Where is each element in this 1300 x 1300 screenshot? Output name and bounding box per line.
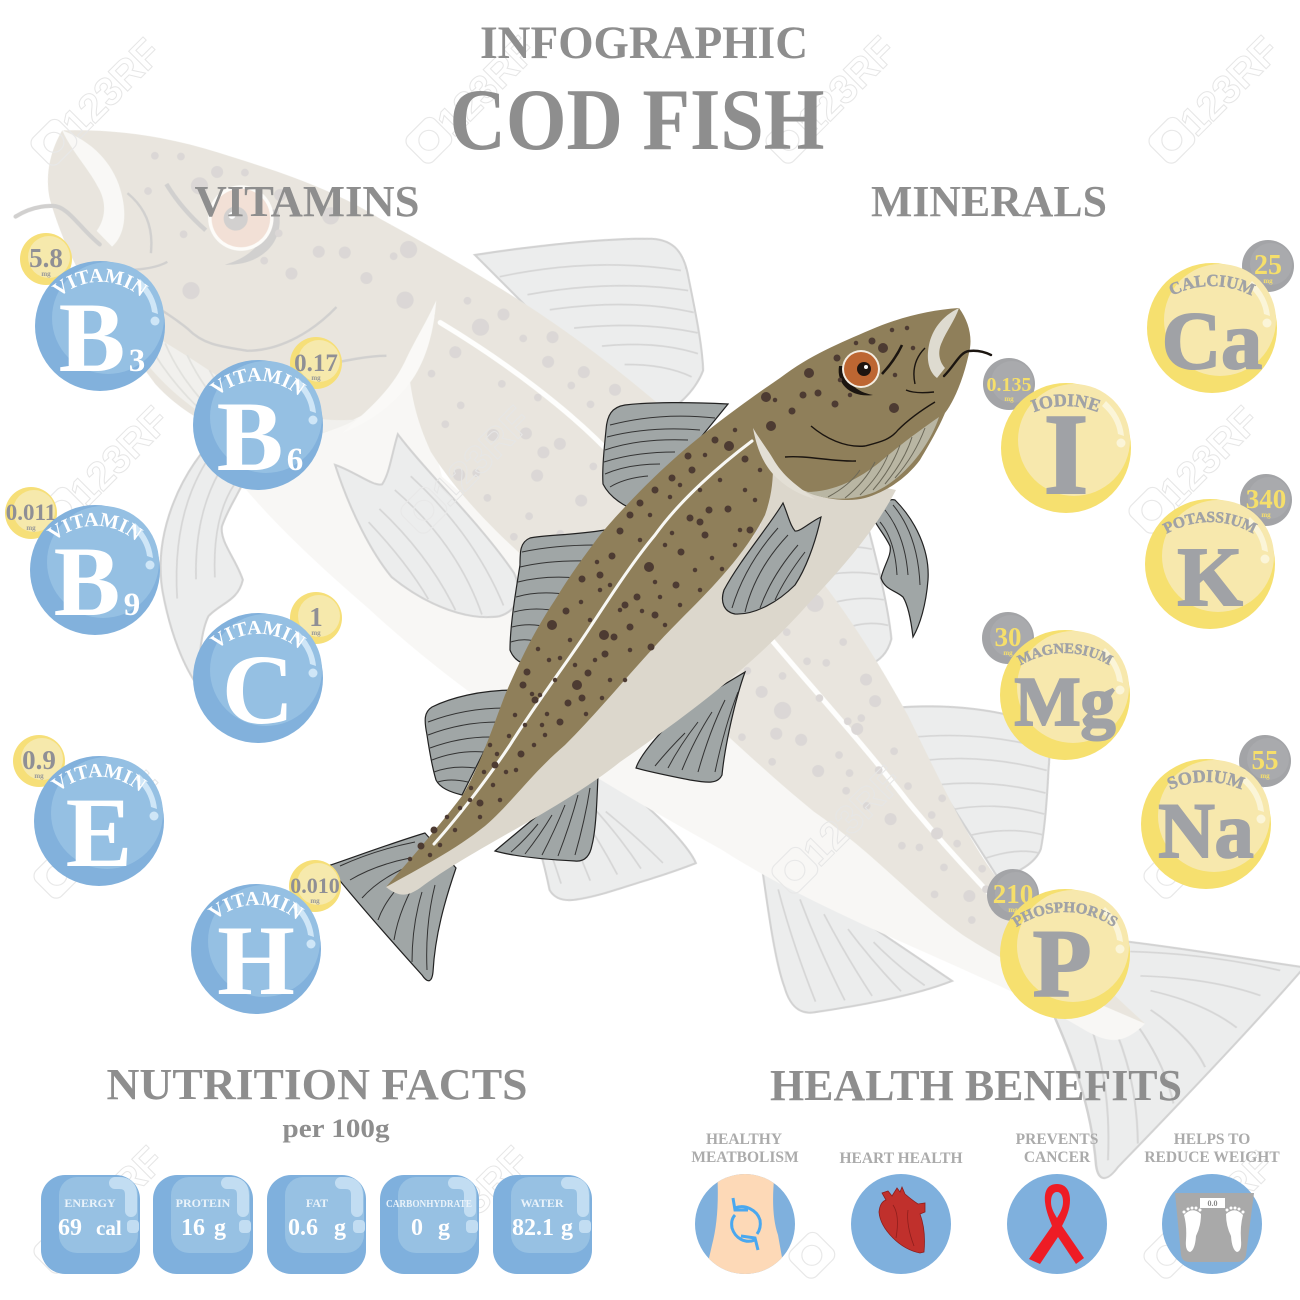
heading: nutrition facts: NUTRITION FACTS bbox=[106, 1060, 528, 1109]
vitamin E: E bbox=[66, 777, 132, 888]
vitamin B6: 0.17 bbox=[294, 350, 338, 377]
mineral calcium: CALCIUM bbox=[1170, 274, 1256, 296]
vitamin B9: B bbox=[54, 526, 120, 637]
mineral iodine: mg bbox=[1004, 395, 1014, 403]
tile: carbonhydrate: g bbox=[438, 1215, 450, 1241]
vitamin B9: 9 bbox=[124, 587, 140, 623]
vitamin E bbox=[13, 735, 164, 888]
mineral iodine bbox=[983, 358, 1131, 518]
benefit: heart health: HEART HEALTH bbox=[839, 1150, 963, 1167]
mineral iodine: I bbox=[1044, 391, 1088, 518]
tile: energy: cal bbox=[96, 1216, 122, 1240]
icon: scale with feet bbox=[1175, 1193, 1254, 1262]
title: INFOGRAPHIC bbox=[480, 17, 808, 69]
vitamin B9: 0.011 bbox=[6, 500, 56, 525]
mineral magnesium: MAGNESIUM bbox=[1016, 643, 1114, 666]
heading: health benefits: HEALTH BENEFITS bbox=[770, 1061, 1182, 1110]
mineral magnesium bbox=[982, 612, 1130, 760]
mineral sodium bbox=[1141, 735, 1291, 889]
mineral calcium bbox=[1147, 240, 1294, 393]
benefit: healthy metabolism bbox=[691, 1131, 799, 1280]
vitamin B6: B bbox=[217, 381, 283, 492]
tile: carbonhydrate bbox=[380, 1175, 479, 1274]
tile: carbonhydrate: CARBONHYDRATE bbox=[386, 1198, 472, 1210]
vitamin H: 0.010 bbox=[290, 873, 340, 898]
benefit: healthy metabolism: MEATBOLISM bbox=[691, 1149, 799, 1166]
vitamin B3 bbox=[20, 233, 199, 399]
benefit: helps to reduce weight: REDUCE WEIGHT bbox=[1144, 1149, 1280, 1166]
watermarks: 123RF bbox=[1167, 1144, 1283, 1260]
vitamin B6 bbox=[193, 337, 342, 492]
watermarks: 123RF bbox=[1152, 399, 1268, 515]
vitamin B3: mg bbox=[41, 270, 51, 278]
icon: cycle arrows bbox=[732, 1198, 760, 1250]
benefit: helps to reduce weight: HELPS TO bbox=[1174, 1131, 1250, 1148]
watermarks: 123RF bbox=[422, 1139, 538, 1255]
tile: protein: g bbox=[214, 1215, 226, 1241]
vitamin E: mg bbox=[34, 772, 44, 780]
mineral iodine: 0.135 bbox=[986, 374, 1032, 396]
tile: energy: 69 bbox=[58, 1215, 82, 1241]
mineral calcium: 25 bbox=[1254, 250, 1282, 281]
heading: nutrition facts bbox=[106, 1060, 528, 1143]
title: COD FISH bbox=[450, 72, 824, 169]
vitamin C: VITAMIN bbox=[209, 620, 306, 648]
vitamin B3: B bbox=[59, 282, 125, 393]
mineral phosphorus: mg bbox=[1008, 906, 1018, 914]
watermarks: 123RF bbox=[62, 399, 178, 515]
heading: minerals: MINERALS bbox=[871, 177, 1107, 226]
benefit: prevents cancer: CANCER bbox=[1024, 1149, 1091, 1166]
icon: heart bbox=[879, 1187, 925, 1253]
tile: energy: ENERGY bbox=[64, 1196, 116, 1210]
mineral phosphorus: 210 bbox=[993, 879, 1033, 909]
tile: protein: 16 bbox=[181, 1215, 205, 1241]
vitamin C bbox=[193, 592, 342, 745]
tile: protein: PROTEIN bbox=[176, 1196, 231, 1210]
mineral sodium: 55 bbox=[1252, 745, 1278, 775]
watermarks: 123RF bbox=[57, 1139, 173, 1255]
tile: protein bbox=[153, 1175, 253, 1274]
mineral phosphorus: P bbox=[1033, 910, 1091, 1017]
mineral potassium bbox=[1145, 474, 1292, 629]
vitamin B6: VITAMIN bbox=[209, 368, 306, 396]
watermarks: 123RF bbox=[54, 31, 170, 147]
tile: fat bbox=[267, 1175, 366, 1274]
vitamin C: mg bbox=[311, 629, 321, 637]
tile: fat: FAT bbox=[306, 1196, 328, 1210]
mineral potassium: POTASSIUM bbox=[1162, 512, 1258, 534]
tile: energy bbox=[41, 1175, 140, 1274]
watermarks: 123RF bbox=[57, 764, 173, 880]
mineral magnesium: Mg bbox=[1014, 664, 1116, 741]
title bbox=[450, 17, 824, 169]
mineral magnesium: 30 bbox=[994, 622, 1022, 652]
tile: water: WATER bbox=[520, 1196, 564, 1210]
tile: water: 82.1 bbox=[512, 1215, 554, 1241]
watermarks: 123RF bbox=[1167, 764, 1283, 880]
vitamin B6: mg bbox=[311, 374, 321, 382]
benefit: heart health bbox=[839, 1150, 963, 1274]
vitamin C: 1 bbox=[309, 602, 323, 632]
tile: water bbox=[493, 1175, 592, 1274]
mineral calcium: Ca bbox=[1162, 295, 1262, 386]
benefit: helps to reduce weight bbox=[1144, 1131, 1280, 1274]
vitamin H: H bbox=[217, 905, 295, 1016]
mineral sodium: mg bbox=[1260, 772, 1270, 780]
mineral potassium: K bbox=[1177, 531, 1243, 624]
mineral iodine: IODINE bbox=[1030, 394, 1100, 412]
vitamin H: mg bbox=[310, 897, 320, 905]
mineral potassium: 340 bbox=[1246, 484, 1286, 514]
vitamin C: C bbox=[222, 634, 294, 745]
mineral magnesium: mg bbox=[1003, 649, 1013, 657]
watermarks: 123RF bbox=[424, 399, 540, 515]
heading: nutrition facts: per 100g bbox=[282, 1114, 390, 1143]
vitamin B9: VITAMIN bbox=[46, 512, 144, 540]
vitamin H bbox=[191, 860, 341, 1016]
tile: fat: 0.6 bbox=[288, 1215, 318, 1241]
watermarks: 123RF bbox=[429, 29, 545, 145]
vitamin B3: VITAMIN bbox=[51, 268, 148, 296]
tile: fat: g bbox=[334, 1215, 346, 1241]
mineral phosphorus: PHOSPHORUS bbox=[1011, 902, 1118, 928]
benefit: prevents cancer bbox=[1007, 1131, 1107, 1274]
watermarks: 123RF bbox=[789, 29, 905, 145]
vitamin B3: 5.8 bbox=[29, 243, 63, 273]
vitamin B9 bbox=[5, 487, 160, 637]
benefit: helps to reduce weight: 0.0 bbox=[1208, 1199, 1218, 1208]
mineral sodium: SODIUM bbox=[1167, 770, 1246, 790]
watermarks: 123RF bbox=[1172, 29, 1288, 145]
mineral potassium: mg bbox=[1261, 511, 1271, 519]
mineral calcium: mg bbox=[1263, 277, 1273, 285]
vitamin B3: 3 bbox=[129, 343, 145, 379]
benefit: healthy metabolism: HEALTHY bbox=[706, 1131, 782, 1148]
watermarks: 123RF bbox=[795, 759, 911, 875]
heading: vitamins: VITAMINS bbox=[194, 177, 420, 226]
vitamin E: 0.9 bbox=[22, 745, 56, 775]
benefit: prevents cancer: PREVENTS bbox=[1016, 1131, 1098, 1148]
vitamin B9: mg bbox=[26, 524, 36, 532]
mineral sodium: Na bbox=[1158, 787, 1254, 874]
tile: carbonhydrate: 0 bbox=[411, 1215, 423, 1241]
vitamin E: VITAMIN bbox=[50, 764, 148, 792]
mineral phosphorus bbox=[987, 869, 1130, 1019]
main cod fish illustration bbox=[328, 308, 991, 981]
vitamin H: VITAMIN bbox=[207, 892, 304, 920]
tile: water: g bbox=[561, 1215, 573, 1241]
vitamin B6: 6 bbox=[287, 442, 303, 478]
icon: red ribbon bbox=[1029, 1184, 1084, 1264]
